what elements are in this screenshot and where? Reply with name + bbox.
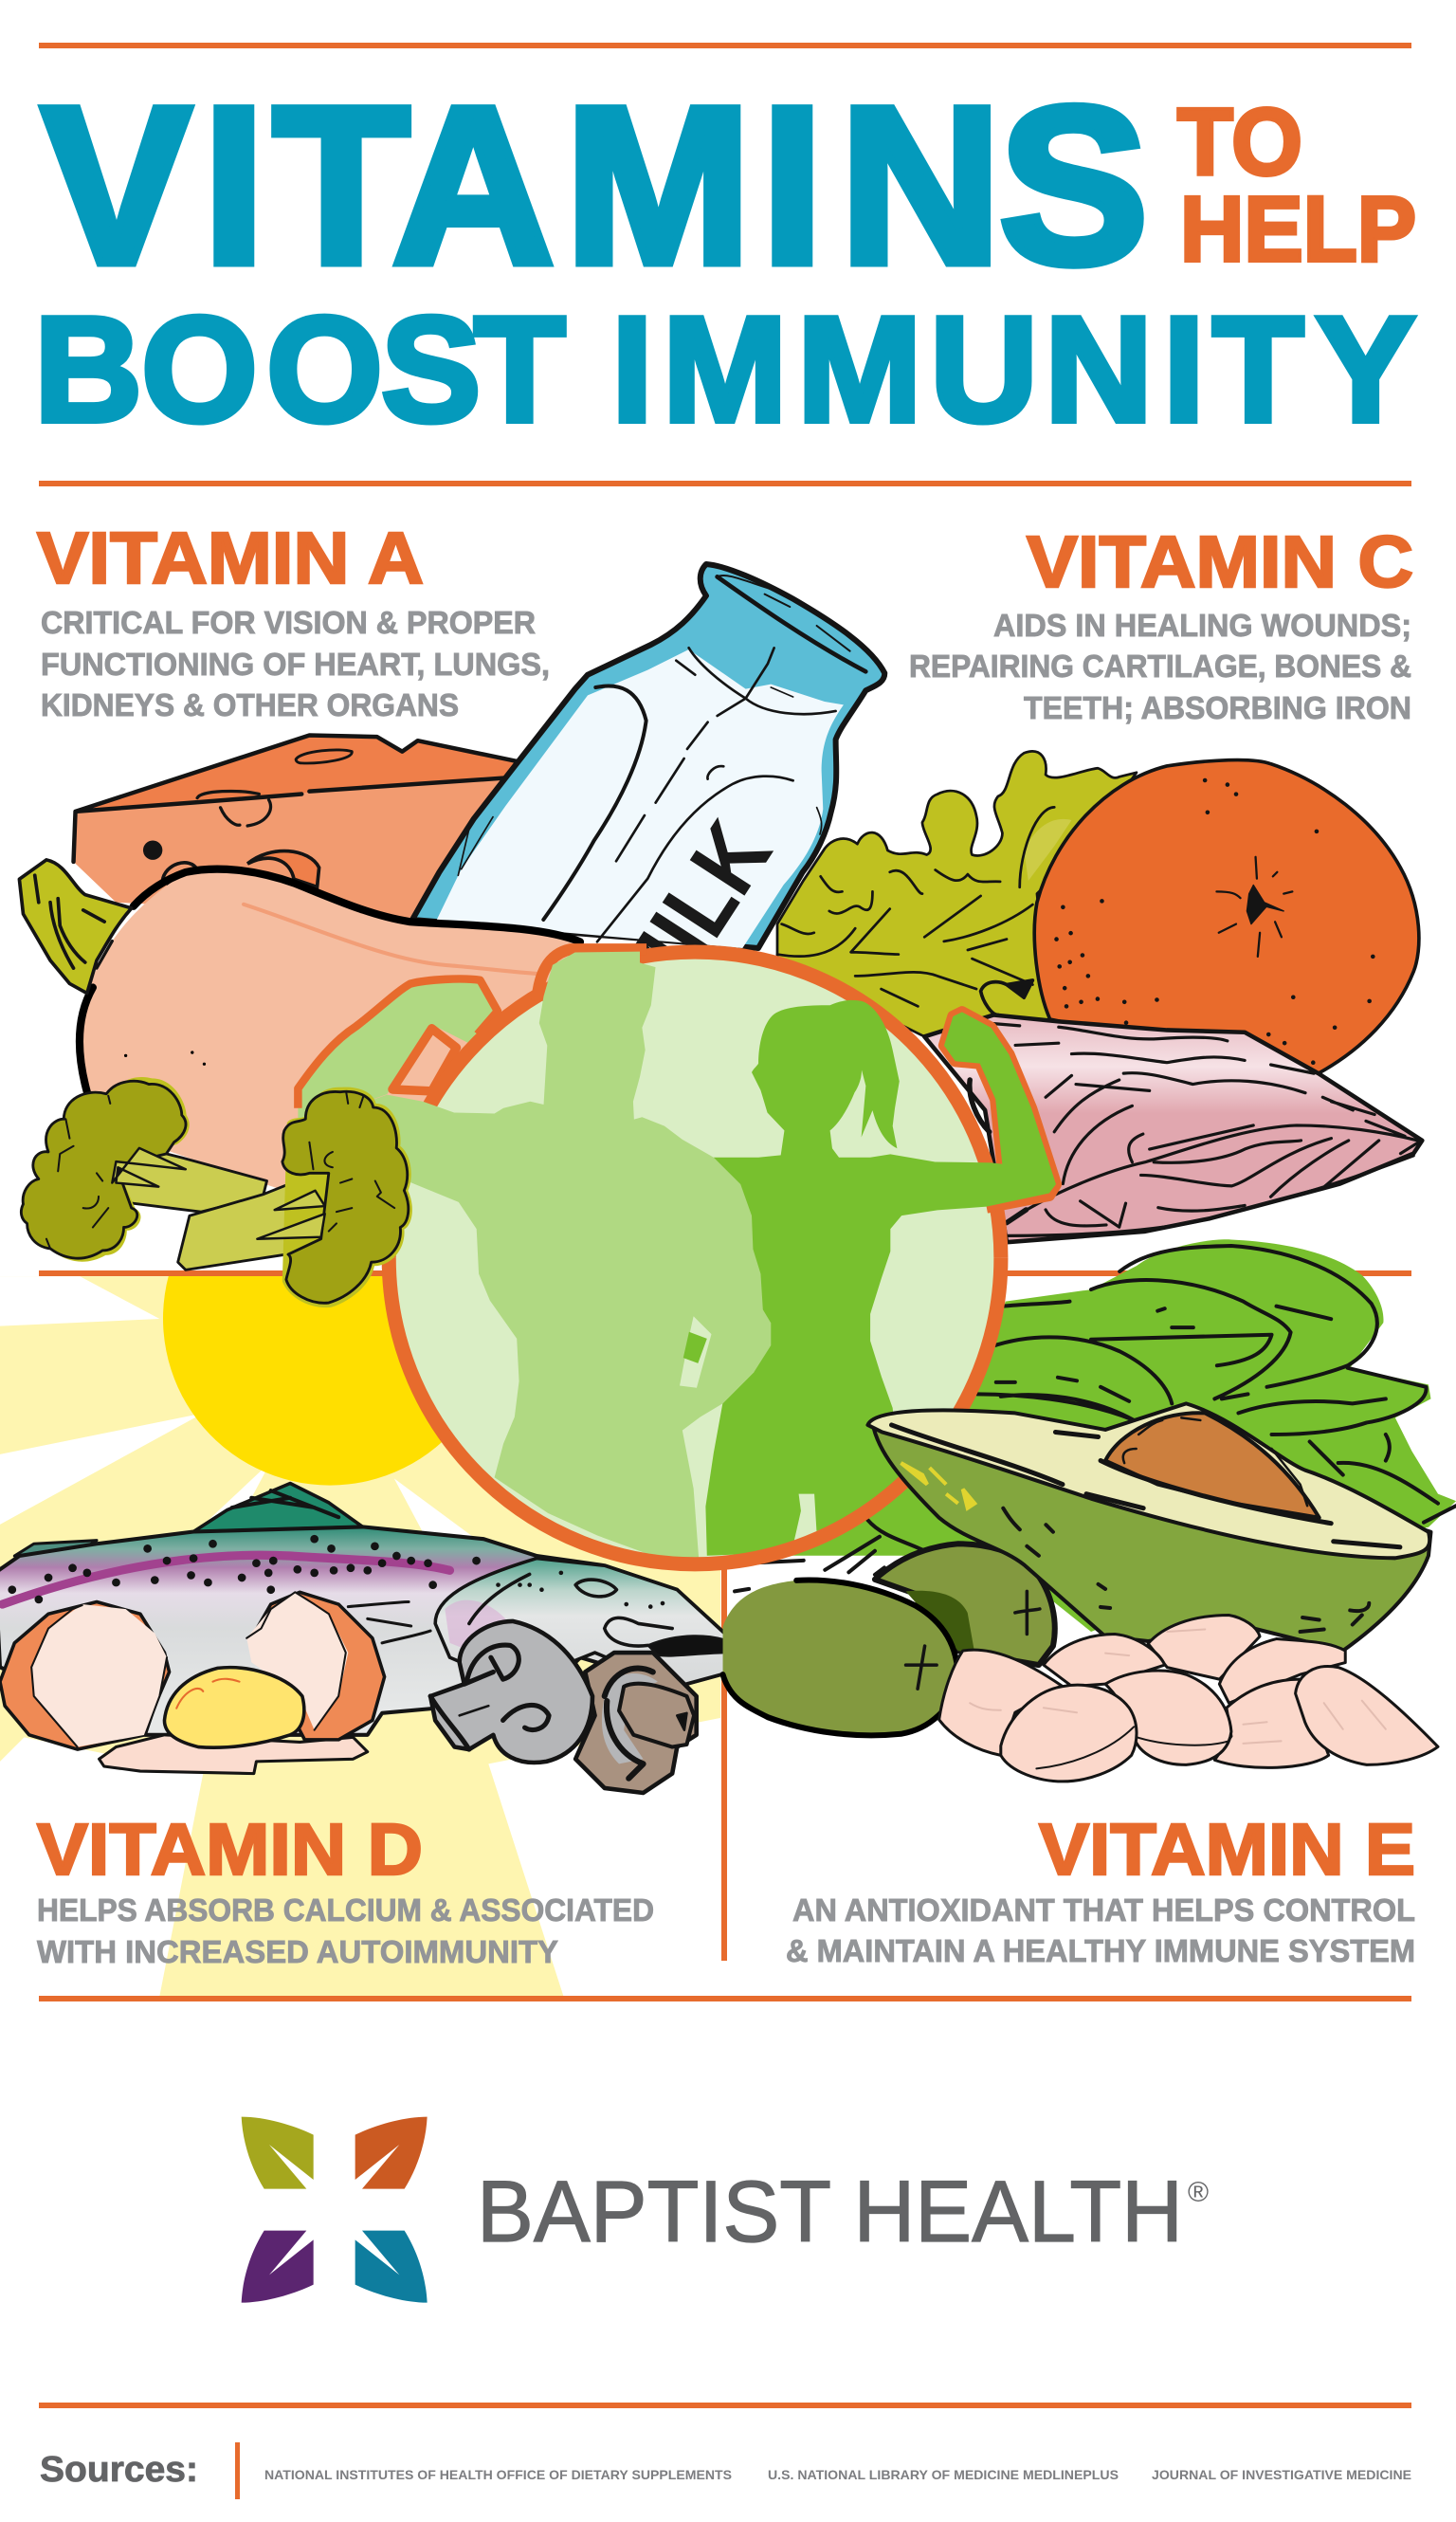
man arm behind circle <box>298 978 498 1126</box>
spinach <box>735 1239 1456 1632</box>
vitamin D text: HELPS ABSORB CALCIUM & ASSOCIATED <box>37 1892 654 1928</box>
sources <box>40 2442 1411 2499</box>
lettuce stub behind chicken <box>19 860 132 994</box>
sun <box>163 1275 497 1486</box>
title <box>34 61 1416 453</box>
sources: JOURNAL OF INVESTIGATIVE MEDICINE <box>1152 2467 1411 2482</box>
eggs <box>0 1592 385 1774</box>
mushrooms <box>430 1621 697 1793</box>
rule above logo <box>39 1996 1411 2001</box>
lettuce <box>777 751 1137 1036</box>
avocado <box>867 1403 1430 1651</box>
title: TO <box>1177 89 1302 195</box>
sources: U.S. NATIONAL LIBRARY OF MEDICINE MEDLINEPLUS <box>768 2467 1119 2482</box>
man silhouette <box>298 949 771 1561</box>
orange <box>1034 760 1419 1073</box>
vitamin D text <box>37 1809 654 1969</box>
title: BOOST IMMUNITY <box>34 286 1415 453</box>
vitamin A text <box>37 518 550 722</box>
chicken <box>78 868 603 1223</box>
vitamin A text: FUNCTIONING OF HEART, LUNGS, <box>41 647 550 682</box>
broccoli <box>21 1077 412 1307</box>
vitamin D text: VITAMIN D <box>37 1809 423 1891</box>
sun rays <box>0 1276 720 1996</box>
vitamin C text <box>909 521 1413 725</box>
rule above sources <box>39 2403 1411 2408</box>
vitamin C text: VITAMIN C <box>1027 521 1413 603</box>
sources: Sources: <box>40 2450 198 2490</box>
vitamin E text: AN ANTIOXIDANT THAT HELPS CONTROL <box>792 1892 1415 1928</box>
sweet potato <box>924 1014 1422 1242</box>
vitamin E text: & MAINTAIN A HEALTHY IMMUNE SYSTEM <box>786 1933 1415 1968</box>
vitamin D text: WITH INCREASED AUTOIMMUNITY <box>37 1934 558 1969</box>
milk bottle: MILK <box>592 804 792 1032</box>
almonds <box>939 1615 1438 1782</box>
title: VITAMINS <box>42 61 1148 311</box>
vitamin E text <box>786 1809 1415 1968</box>
vitamin C text: TEETH; ABSORBING IRON <box>1024 690 1411 725</box>
middle rule and divider <box>39 1270 1411 1961</box>
vitamin C text: REPAIRING CARTILAGE, BONES & <box>909 649 1411 684</box>
sources: NATIONAL INSTITUTES OF HEALTH OFFICE OF DIETARY SUPPLEMENTS <box>264 2467 732 2482</box>
vitamin A text: KIDNEYS & OTHER ORGANS <box>41 687 459 722</box>
milk bottle <box>412 564 884 1032</box>
salmon fish <box>0 1483 736 1735</box>
olives <box>723 1544 1055 1735</box>
logo mark <box>242 2117 428 2303</box>
logo wordmark: ® <box>1188 2177 1209 2208</box>
woman silhouette <box>705 1000 1056 1556</box>
vitamin A text: VITAMIN A <box>37 518 424 599</box>
second rule <box>39 481 1411 486</box>
title: HELP <box>1180 177 1416 281</box>
vitamin A text: CRITICAL FOR VISION & PROPER <box>41 605 536 640</box>
circle with man and woman silhouettes <box>298 949 1056 1564</box>
vitamin E text: VITAMIN E <box>1039 1809 1415 1891</box>
vitamin C text: AIDS IN HEALING WOUNDS; <box>993 608 1411 643</box>
cheese <box>74 734 519 918</box>
logo wordmark: BAPTIST HEALTH <box>477 2164 1183 2260</box>
top rule <box>39 43 1411 48</box>
